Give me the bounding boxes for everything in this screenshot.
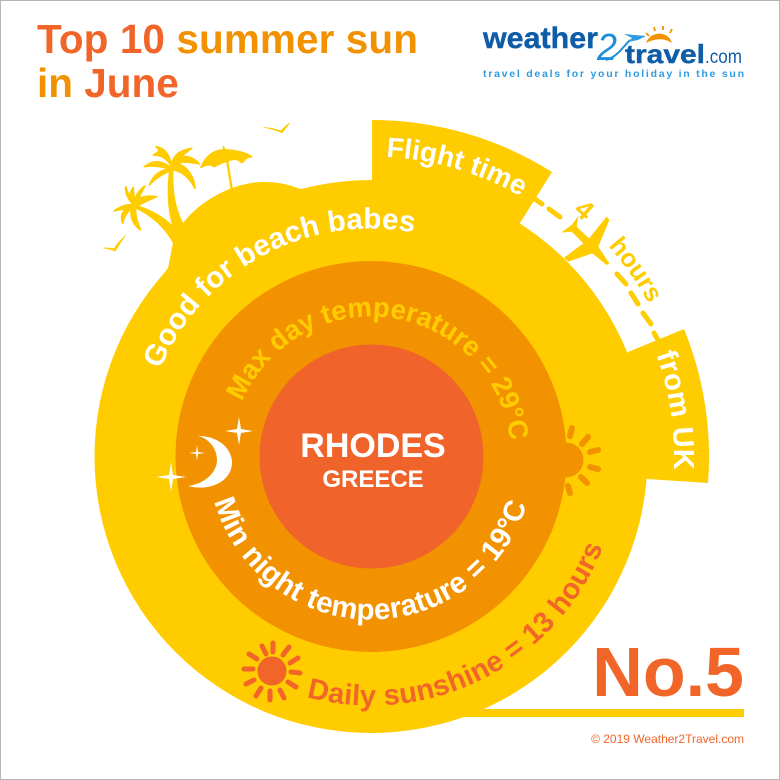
yellow outer ring with tabs	[94, 120, 709, 733]
title: in June	[37, 60, 179, 106]
flight path dashes	[535, 199, 658, 340]
logo: weather2travel.com: weather	[482, 22, 598, 55]
label: daily sunshine: Daily sunshine = 13 hours	[308, 544, 602, 712]
copyright: © 2019 Weather2Travel.com	[591, 732, 744, 746]
orange temperature ring	[176, 261, 566, 652]
label: max day temperature: Max day temperature = 29°C	[226, 302, 528, 440]
icon: half sun	[549, 428, 598, 493]
title	[37, 16, 418, 106]
label: Good for beach babes: Good for beach babes	[145, 207, 414, 366]
title: Top 10 summer sun	[37, 16, 418, 62]
ranking number: No.5	[592, 633, 744, 711]
red centre circle	[260, 344, 484, 568]
logo: weather2travel.com: .com	[705, 47, 742, 68]
icon: plane	[561, 216, 609, 265]
destination name	[300, 427, 446, 493]
tab label: Flight time: Flight time	[388, 138, 525, 194]
label: 4: 4	[575, 203, 594, 220]
label: hours: hours	[609, 235, 658, 302]
logo: weather2travel.com: travel deals for your holiday in the sun	[483, 68, 744, 80]
destination name: RHODES	[300, 427, 446, 465]
bar under number	[458, 709, 744, 717]
logo: weather2travel.com: travel	[625, 39, 705, 69]
logo: weather2travel.com: 2	[596, 27, 617, 69]
logo: weather2travel.com	[482, 22, 744, 80]
icon: moon and stars	[156, 417, 253, 492]
icon: sun	[244, 643, 300, 700]
beach scene: palm trees, umbrella and birds	[103, 123, 290, 251]
label: min night temperature: Min night temperature = 19°C	[214, 496, 525, 626]
tab label: from UK: from UK	[657, 350, 694, 470]
destination name: GREECE	[322, 466, 424, 493]
